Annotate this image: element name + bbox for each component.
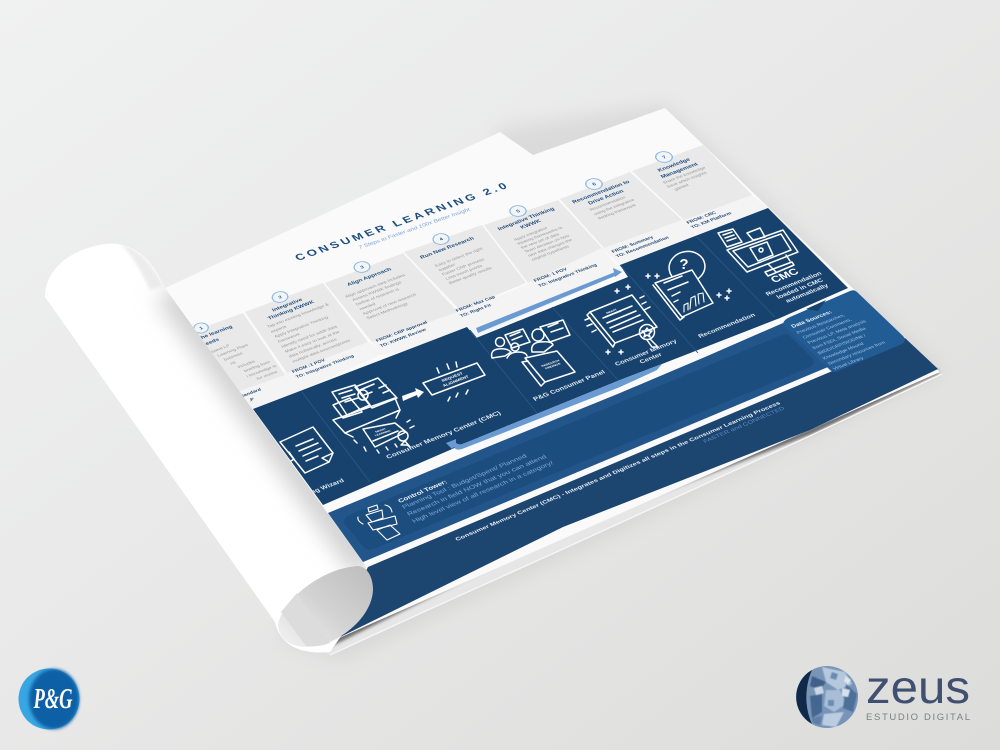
logo: P&G: P&G	[33, 683, 73, 715]
step 5 text: original hypothesis	[530, 244, 571, 262]
number 6: 6	[591, 182, 598, 187]
label: consumer memory center: Center	[638, 352, 664, 365]
icon: consumer panel	[492, 320, 575, 386]
icon: control tower	[358, 505, 400, 540]
number 5: 5	[515, 209, 522, 214]
card 5	[484, 200, 602, 283]
research findings label: RESEARCH	[540, 359, 560, 368]
step 3 text: Assess KWWK findings	[351, 280, 403, 302]
step 2 text: TO: Integrative Thinking	[295, 354, 355, 380]
step 3 text: Align approach step includes:	[344, 272, 407, 299]
icon: cmc monitor	[718, 228, 798, 276]
number 1: 1	[198, 326, 205, 331]
step 5 text: Apply integrative	[513, 226, 548, 242]
label: recommendation: Recommendation	[697, 312, 757, 339]
step 2 text: multiple data sources/points	[291, 338, 352, 363]
lower return arrow	[446, 364, 662, 450]
step 1 text: briefing form	[243, 360, 271, 373]
step 5 text	[497, 204, 599, 289]
card 1	[180, 313, 285, 392]
smart learning label on box: SMART	[374, 427, 387, 433]
step 1 text: he learning	[200, 325, 234, 340]
step 2 text: experts	[270, 324, 288, 334]
subtitle: 7 Steps to Faster and 100x Better Insight	[358, 208, 472, 250]
logo: P&G	[18, 668, 80, 730]
step 6 text: FROM: Summary	[610, 235, 655, 254]
step 3 text: Approval of new research	[362, 292, 418, 316]
card 4	[404, 225, 526, 310]
number 7: 7	[661, 155, 668, 160]
step 7 text: Management	[660, 162, 700, 180]
inner tower panel	[344, 334, 814, 550]
label: p&g consumer panel: P&G Consumer Panel	[532, 369, 607, 402]
step 5 text: Team decision on how	[523, 233, 571, 254]
step cards	[180, 145, 768, 409]
step 1 text: eeds	[204, 337, 221, 347]
step 3 text: TO: KWWK Review	[379, 327, 428, 349]
panel: data sources: BitDD/CRP/SIOD/Ntl /	[817, 333, 868, 356]
zeus wordmark: zeus	[866, 661, 970, 713]
step 6 text: Recommendation	[588, 195, 627, 212]
panel: data sources: from FSDI, Social Media	[811, 326, 868, 351]
step 4 text	[419, 232, 501, 319]
column dividers	[302, 237, 775, 482]
step 4 text: TO: Right Fit	[459, 303, 493, 319]
step 5 text: Integrative Thinking	[497, 207, 556, 232]
step 7 text	[653, 150, 734, 230]
label: planning wizard: ng Wizard	[309, 478, 346, 495]
step 2 text: Thinking KWWK	[267, 300, 316, 321]
panel: data sources: Consumer Comments,	[801, 318, 853, 340]
step 2 text	[263, 290, 355, 380]
FROM strips	[237, 195, 768, 409]
step 2 text: Integrative	[271, 298, 304, 313]
step 3 text: Align Approach	[346, 267, 393, 288]
panel: data sources: Knowledge Mound	[822, 341, 866, 361]
step 2 text: Identify need for addtl data	[280, 324, 338, 349]
step 1 text	[191, 321, 282, 404]
fold shading	[170, 290, 368, 567]
step 1 text: business	[223, 351, 244, 362]
label: consumer memory center cmc: Consumer Memory Center (CMC)	[385, 410, 503, 460]
roll inner opening	[278, 566, 373, 647]
footer tagline: FASTER and CONNECTED	[703, 406, 786, 444]
roll end shading	[120, 244, 163, 290]
step 4 text: Easy to select the right	[434, 247, 484, 268]
step 7 text: FROM: CRC	[685, 211, 718, 225]
step 3 text: Define of research is	[355, 287, 401, 306]
step 1 text: tandard	[241, 388, 262, 398]
question mark: ?	[679, 256, 689, 273]
step 2 text: FROM :1 POV	[291, 359, 327, 374]
step 4 text: supplier	[437, 262, 457, 272]
icon: smart learning document	[585, 285, 658, 354]
step 5 text: FROM: 1 POV	[533, 268, 569, 283]
label: consumer memory center: Consumer Memory	[614, 339, 678, 367]
card 2	[245, 283, 368, 373]
step 6 text: Drive Action	[587, 189, 626, 206]
number 3: 3	[359, 265, 366, 270]
icon: request alignment box	[423, 362, 485, 401]
number 4: 4	[438, 237, 445, 242]
research findings label: FINDINGS	[544, 362, 561, 370]
smart learning label: SMART	[605, 308, 618, 315]
step 5 text: KWWK	[520, 219, 543, 230]
arrow to request alignment	[402, 388, 424, 401]
page sheet	[165, 108, 940, 642]
smart learning label: LEARNING	[605, 309, 623, 318]
footer text: Consumer Memory Center (CMC) - Integrates and Digitizes all steps in the Consumer Learning Process	[455, 401, 783, 542]
panel: data sources	[783, 290, 905, 372]
icon: recommendation	[646, 249, 731, 320]
step 1 text: .P	[248, 397, 256, 403]
inner under sheet	[281, 593, 330, 646]
rolled page	[45, 244, 373, 653]
panel: data sources: Previous LP, Meta analysis	[806, 319, 868, 345]
label: cmc: CMC	[769, 267, 802, 285]
step 1 text: istent LP	[210, 343, 231, 354]
smart learning label on box: LEARNING	[374, 429, 392, 437]
step 6 text: using the integrative	[593, 197, 636, 216]
step 6 text: TO: Recommendation	[615, 235, 671, 259]
zeus tagline: ESTUDIO DIGITAL	[866, 712, 970, 723]
control tower text: High level view of all research in a category/	[411, 460, 555, 524]
step 2 text: data holistically, across	[288, 337, 338, 358]
step 4 text: FROM: Max Cap	[455, 295, 497, 313]
number 2: 2	[277, 295, 284, 300]
step 5 text: the new set of data	[520, 232, 561, 250]
step 7 text: TO: KM Platform	[690, 211, 734, 230]
step 1 text: Learning Plant	[216, 343, 250, 358]
step 2 text: Make it easy to look at the	[284, 330, 341, 353]
panel: footer band	[330, 338, 938, 642]
step 6 text: thinking framework	[597, 203, 638, 220]
step 3 text: FROM: CRP approval	[375, 321, 429, 343]
logo: zeus	[796, 661, 970, 728]
step 5 text: TO: Integrative Thinking	[537, 263, 599, 289]
step 3 text: needed	[358, 302, 377, 311]
icon: request alignment box: ALIGNMENT	[442, 374, 470, 388]
icon: consumer memory center	[332, 378, 414, 453]
step 3 text	[344, 260, 433, 349]
step 7 text: gained	[673, 183, 690, 191]
card 7	[632, 145, 752, 220]
control tower text: Research in field NOW that you can attend	[406, 454, 549, 517]
step 3 text: Select Methodology	[365, 301, 410, 320]
step 2 text: Apply Integrative Thinking	[273, 315, 330, 339]
step 4 text: Run New Research	[419, 236, 476, 260]
step 7 text: Save which insights	[665, 170, 709, 189]
card 6	[560, 172, 682, 248]
label: recommendation loaded in cmc: loaded in CMC	[775, 278, 825, 300]
step 7 text: Share the knowledge	[661, 166, 707, 185]
step 6 text: Recommendation to	[571, 180, 631, 205]
panel: data sources: Virtual Library	[832, 356, 866, 371]
open magazine page	[165, 108, 940, 642]
panel: data sources: Previous Researches,	[796, 314, 846, 335]
icon: planning wizard document	[280, 427, 333, 473]
panel: main icon row	[253, 208, 848, 505]
step 2 text: Tap into existing knowledge &	[266, 302, 330, 329]
step 1 text: for review	[256, 369, 279, 381]
step 1 text: includes	[236, 359, 257, 369]
control tower text: Control Tower:	[397, 479, 449, 504]
step 1 text: i knowledge is	[246, 363, 278, 378]
icon: request alignment box: REQUEST	[440, 371, 464, 383]
panel: data sources: Secondary resources from	[827, 340, 887, 366]
card 3	[325, 253, 458, 342]
zeus emblem	[796, 666, 858, 728]
under sheet with shadow	[300, 371, 942, 655]
panel: control tower band	[328, 323, 828, 562]
control tower text: Planning Tool : Budget/Spent/ Planned	[401, 453, 529, 510]
step 6 text	[571, 177, 671, 259]
soft shadow of magazine	[280, 104, 945, 660]
step 4 text: Less touch points	[444, 263, 484, 281]
step 7 text: Knowledge	[657, 157, 692, 173]
label: recommendation loaded in cmc: Recommendation	[765, 271, 824, 297]
step 1 text: ns	[229, 360, 237, 365]
step 4 text: Faster CRP process	[441, 257, 486, 276]
step 5 text: new data changes the	[527, 238, 574, 258]
label: recommendation loaded in cmc: automatically	[784, 283, 831, 304]
step 5 text: thinking frameworks to	[516, 225, 564, 246]
top progress arrow	[476, 268, 622, 333]
step 2 text: framework	[277, 332, 302, 344]
panel: data sources: Data Sources:	[790, 310, 834, 329]
title: CONSUMER LEARNING 2.0	[293, 182, 509, 263]
step 4 text: Better quality results	[448, 265, 493, 285]
